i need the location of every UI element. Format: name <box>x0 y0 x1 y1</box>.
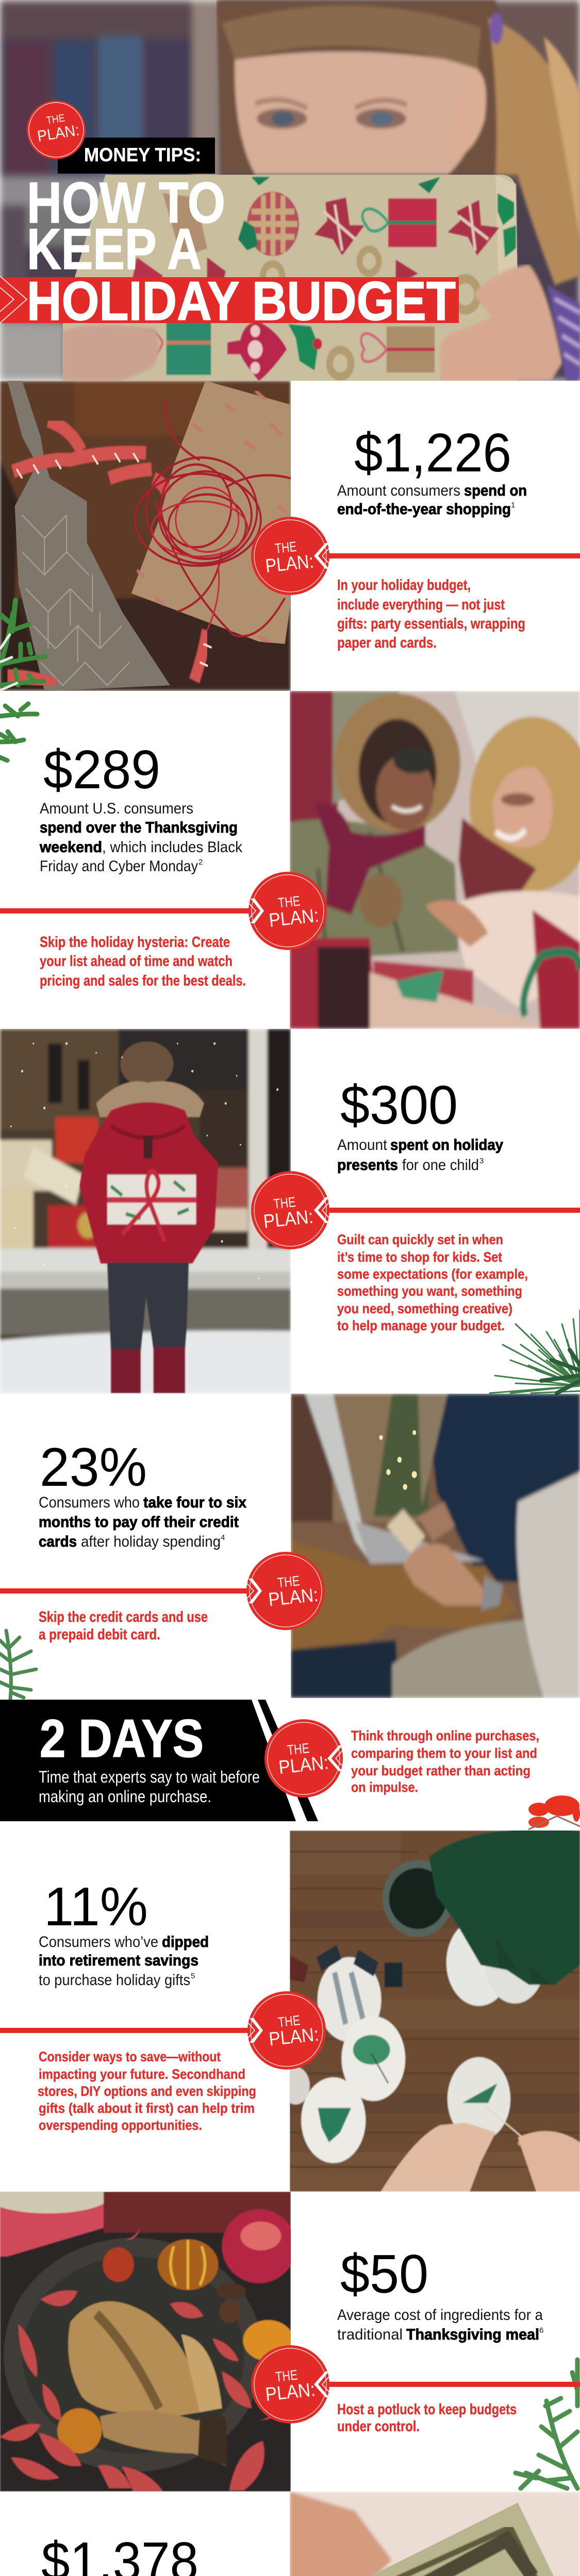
stat description: presents <box>337 1157 398 1174</box>
stat description: Thanksgiving meal <box>406 2326 539 2343</box>
tag: money tips <box>58 138 215 174</box>
divider line and the plan badge <box>0 1552 325 1630</box>
plan text: include everything: In your holiday budget, <box>337 577 471 594</box>
plan text: think through online purchases: comparing them to your list and <box>351 1745 537 1761</box>
plan text: host a potluck: under control. <box>337 2418 420 2435</box>
hero photo: girl holding wrapped gift <box>0 0 580 381</box>
stat description: traditional <box>337 2326 403 2343</box>
divider line and the plan badge <box>251 1171 580 1249</box>
plan text: guilt and expectations <box>337 1232 528 1333</box>
stat description: to purchase holiday gifts <box>39 1972 190 1989</box>
divider line and the plan badge: THE <box>277 2012 301 2030</box>
plan text: ways to save: Consider ways to save—without <box>39 2049 221 2064</box>
panel: 2 days black banner <box>0 1700 318 1821</box>
stat description: 4 <box>221 1533 225 1542</box>
plan text: ways to save: impacting your future. Secondhand <box>39 2066 245 2082</box>
plan text: skip the hysteria: Skip the holiday hysteria: Create <box>40 934 230 951</box>
plan text: include everything: paper and cards. <box>337 635 437 651</box>
plan text: skip the hysteria: pricing and sales for the best deals. <box>40 973 246 989</box>
plan text: ways to save: gifts (talk about it first) can help trim <box>39 2100 255 2116</box>
divider line and the plan badge: PLAN: <box>262 1206 314 1232</box>
stat panel: 23% <box>39 1437 246 1550</box>
divider line and the plan badge: THE <box>275 2367 299 2385</box>
stat description: 3 <box>479 1157 484 1165</box>
panel: 2 days black banner: 2 DAYS <box>40 1709 204 1769</box>
photo: wrapped bottle and parcel with red ribbon <box>0 381 291 691</box>
photo: mother and child shopping <box>290 691 580 1029</box>
stat panel: $1,226 <box>337 422 527 518</box>
plan text: prepaid debit card <box>39 1609 208 1643</box>
plan text: guilt and expectations: to help manage your budget. <box>337 1318 505 1333</box>
divider line and the plan badge: THE <box>274 539 297 556</box>
icon: cedar sprig <box>0 1631 36 1699</box>
plan text: include everything: gifts: party essentials, wrapping <box>337 616 525 632</box>
stat description: Amount <box>337 1137 388 1154</box>
divider line and the plan badge: PLAN: <box>264 2379 316 2405</box>
stat description: 2 <box>198 858 203 867</box>
the plan badge <box>264 1719 344 1798</box>
divider line and the plan badge: THE <box>277 893 301 911</box>
stat description: end-of-the-year shopping <box>337 501 511 518</box>
stat description: months to pay off their credit <box>39 1514 239 1531</box>
stat description <box>337 2307 543 2343</box>
plan text: host a potluck: Host a potluck to keep budgets <box>337 2401 517 2418</box>
stat description: spend over the Thanksgiving <box>40 819 238 836</box>
stat panel: $289: $289 <box>43 739 160 800</box>
photo: child in red coat at shop window <box>0 1029 291 1394</box>
icon: red berries <box>528 1795 580 1829</box>
plan text: skip the hysteria <box>40 934 246 989</box>
stat description <box>39 1934 209 1989</box>
stat panel: 11%: 11% <box>44 1876 148 1937</box>
title: Money Tips, How to Keep a Holiday Budget: HOW TO <box>27 171 225 235</box>
stat description <box>39 800 243 875</box>
photo: hand pulling hundred dollar bills from wallet <box>290 2492 580 2576</box>
stat panel: 11% <box>39 1876 209 1989</box>
divider line and the plan badge <box>0 1991 326 2070</box>
plan text: guilt and expectations: Guilt can quickly set in when <box>337 1232 503 1247</box>
stat description: for one child <box>402 1157 479 1174</box>
badge: the plan <box>27 100 86 159</box>
divider line and the plan badge <box>251 517 580 595</box>
plan text: ways to save <box>38 2049 256 2133</box>
title: Money Tips, How to Keep a Holiday Budget <box>0 100 459 332</box>
stat description: dipped <box>162 1934 209 1951</box>
stat panel: $300 <box>337 1075 503 1174</box>
badge: the plan: PLAN: <box>36 122 80 145</box>
plan text: think through online purchases: on impulse. <box>351 1780 418 1795</box>
plan text: include everything <box>337 577 525 651</box>
photo: painting watercolor coasters on wood table <box>290 1831 580 2192</box>
stat description: weekend <box>39 839 102 856</box>
stat description: into retirement savings <box>39 1952 198 1969</box>
photo: person paying online with credit card <box>291 1394 580 1698</box>
stat panel: $289 <box>39 739 243 875</box>
stat description: Amount U.S. consumers <box>40 800 193 817</box>
panel: 2 days black banner: Time that experts say to wait before <box>39 1768 260 1786</box>
plan text: include everything: include everything — not just <box>337 597 505 613</box>
stat description: Consumers who <box>39 1494 140 1511</box>
plan text: skip the hysteria: your list ahead of time and watch <box>40 953 233 970</box>
stat description <box>337 1137 503 1174</box>
stat description: 5 <box>191 1972 195 1980</box>
divider line and the plan badge: THE <box>273 1194 296 1212</box>
divider line and the plan badge: PLAN: <box>264 550 314 577</box>
badge: the plan: THE <box>45 112 65 127</box>
divider line and the plan badge: PLAN: <box>268 2024 320 2050</box>
icon: pine needles <box>490 1310 580 1393</box>
plan text: guilt and expectations: some expectations (for example, <box>337 1266 528 1282</box>
stat description: Friday and Cyber Monday <box>40 858 198 875</box>
stat panel: $50: $50 <box>340 2244 428 2304</box>
plan text: think through online purchases: Think through online purchases, <box>351 1728 539 1743</box>
plan text: ways to save: overspending opportunities. <box>39 2117 202 2133</box>
stat panel: 23%: 23% <box>40 1437 147 1498</box>
plan text: think through online purchases <box>351 1728 539 1795</box>
the plan badge: PLAN: <box>277 1752 329 1778</box>
plan text: guilt and expectations: you need, something creative) <box>337 1301 512 1316</box>
stat description <box>39 1494 246 1550</box>
banner: holiday budget: HOLIDAY BUDGET <box>27 270 456 332</box>
plan text: ways to save: stores, DIY options and even skipping <box>38 2083 256 2099</box>
plan text: prepaid debit card: Skip the credit cards and use <box>39 1609 208 1625</box>
stat description: cards <box>39 1533 77 1550</box>
stat description: 6 <box>539 2326 543 2335</box>
icon: cedar sprig <box>516 2360 577 2488</box>
the plan badge: THE <box>287 1740 310 1758</box>
stat description: spent on holiday <box>390 1137 503 1154</box>
title: Money Tips, How to Keep a Holiday Budget: KEEP A <box>27 217 202 281</box>
plan text: guilt and expectations: it’s time to shop for kids. Set <box>337 1249 502 1265</box>
plan text: prepaid debit card: a prepaid debit card. <box>39 1626 160 1643</box>
divider line and the plan badge: PLAN: <box>268 905 320 931</box>
plan text: think through online purchases: your budget rather than acting <box>351 1763 531 1778</box>
divider line and the plan badge: PLAN: <box>267 1584 319 1610</box>
stat description: 1 <box>511 501 515 510</box>
stat description: take four to six <box>143 1494 246 1511</box>
divider line and the plan badge <box>251 2345 580 2424</box>
tag: money tips: MONEY TIPS: <box>84 144 201 165</box>
panel: 2 days black banner: making an online purchase. <box>39 1787 211 1806</box>
icon: cedar sprig <box>0 600 45 760</box>
divider line and the plan badge <box>0 872 327 950</box>
divider line and the plan badge: THE <box>277 1573 301 1590</box>
stat panel: $50 <box>337 2244 543 2343</box>
stat panel: $300: $300 <box>340 1075 458 1136</box>
stat description: Amount consumers <box>337 482 460 499</box>
stat description: , which includes Black <box>102 839 243 856</box>
stat description: Average cost of ingredients for a <box>337 2307 543 2324</box>
plan text: guilt and expectations: something you want, something <box>337 1283 522 1299</box>
stat description <box>337 482 527 518</box>
stat description: after holiday spending <box>81 1533 221 1550</box>
stat panel: $1,226: $1,226 <box>354 422 511 483</box>
stat description: spend on <box>464 482 527 499</box>
stat description: Consumers who’ve <box>39 1934 158 1951</box>
plan text: host a potluck <box>337 2401 517 2435</box>
photo: roast chicken with autumn leaves <box>0 2192 291 2492</box>
